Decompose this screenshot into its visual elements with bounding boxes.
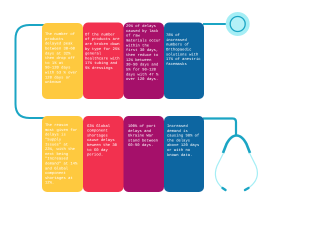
text: port delays: Ukraine War <box>128 134 153 139</box>
text: raw materials: materials occur <box>126 38 161 43</box>
text: product types: 9% dressings <box>85 66 113 71</box>
text: increased demand: the delays <box>167 138 190 143</box>
left connecting tube <box>16 25 44 118</box>
text: raw materials: days with 47 % <box>126 72 159 77</box>
text: reasons for delays: "Increased <box>45 157 68 162</box>
chest piece <box>226 12 250 36</box>
bottom tube to earpieces <box>203 118 236 135</box>
text: reasons for delays: 12%. <box>45 181 54 186</box>
text: increased demand: causing 98% of <box>167 134 200 139</box>
text: raw materials: first 30 days, <box>126 48 158 53</box>
text: product types: of products are <box>85 37 120 42</box>
text: reasons for delays: delays is <box>45 133 66 138</box>
text: products delayed: The number of <box>45 32 76 37</box>
panel: blue top <box>164 22 204 99</box>
ear tip right <box>245 188 248 190</box>
text: component shortages: to 60 day <box>87 148 108 153</box>
infographic canvas <box>0 0 300 200</box>
text: product types: healthcare with <box>85 56 120 61</box>
text: products delayed: between 30-60 <box>45 46 76 52</box>
panel: red top <box>83 22 124 99</box>
text: component shortages: cause delays <box>87 138 115 143</box>
panel: purple top <box>124 22 164 99</box>
text: port delays: 60-90 days. <box>128 143 153 148</box>
text: product types: by type for 25% <box>85 47 120 52</box>
earpiece lower left <box>215 153 224 188</box>
text: port delays: stand between <box>128 138 158 143</box>
text: raw materials: 5% for 90-120 <box>126 68 157 73</box>
text: orthopaedic solutions: facemasks <box>166 62 187 67</box>
text: products delayed: 90-120 days <box>45 66 70 71</box>
ear tip left <box>222 188 226 190</box>
top tube to chest piece <box>203 23 232 25</box>
text: orthopaedic solutions: 17% of anestric <box>166 57 201 62</box>
text: port delays: 100% of port <box>128 124 156 129</box>
text: reasons for delays: demand" at 14% <box>45 162 78 166</box>
text: reasons for delays: most given for <box>45 128 77 133</box>
panel: blue bottom <box>164 116 204 192</box>
text: reasons for delays: and Global <box>45 166 69 171</box>
text: raw materials: 12% between <box>126 58 151 63</box>
text: orthopaedic solutions: increased <box>166 38 187 43</box>
text: raw materials: of raw <box>126 34 141 39</box>
text: orthopaedic solutions: Orthopaedic <box>166 48 192 52</box>
text: reasons for delays: shortages at <box>45 176 73 181</box>
text: component shortages: component <box>87 129 108 134</box>
earpiece lower right <box>248 153 257 188</box>
text: product types: general <box>85 52 102 57</box>
text: raw materials: within the <box>126 43 150 48</box>
text: products delayed: then drop off <box>45 56 76 61</box>
text: increased demand: Increased <box>167 124 188 129</box>
text: component shortages: 63% Global <box>87 124 111 129</box>
text: reasons for delays: 23%, with the <box>45 147 76 152</box>
text: product types: are broken down <box>85 42 120 47</box>
text: component shortages: shortages <box>87 133 108 138</box>
text: reasons for delays: "Supply <box>45 138 62 142</box>
text: raw materials: 29% of delays <box>126 24 156 29</box>
panel: yellow top <box>42 23 83 99</box>
text: increased demand: or with no <box>167 148 191 153</box>
text: component shortages: beween the 30 <box>87 143 118 148</box>
text: product types: Of the number <box>85 32 115 37</box>
text: reasons for delays: component <box>45 171 66 176</box>
text: increased demand: above 120 days <box>167 143 199 148</box>
text: reasons for delays: The reason <box>45 123 68 128</box>
text: increased demand: demand is <box>167 129 188 134</box>
text: products delayed: unknown <box>45 80 61 85</box>
earpiece upper arms <box>223 136 250 153</box>
text: raw materials: caused by lack <box>126 29 159 34</box>
text: orthopaedic solutions: solutions with <box>166 52 198 57</box>
text: products delayed: delayed peak <box>45 42 73 47</box>
text: orthopaedic solutions: numbers of <box>166 43 190 48</box>
panel: purple bottom <box>124 116 164 192</box>
text: increased demand: known data. <box>167 153 192 158</box>
text: products delayed: to 1% at <box>45 61 63 66</box>
text: product types: 17% tubing and <box>85 61 117 66</box>
text: component shortages: period. <box>87 153 103 158</box>
text: products delayed: days at 32% <box>45 51 71 56</box>
text: reasons for delays: Issues" at <box>45 142 68 147</box>
text: products delayed: with 53 % over <box>45 70 77 76</box>
text: products delayed: products <box>45 37 63 42</box>
text: reasons for delays: next being <box>45 152 68 157</box>
text: orthopaedic solutions: 78% of <box>166 33 181 38</box>
text: raw materials: then reduce to <box>126 53 159 58</box>
text: products delayed: 120 days or <box>45 75 70 80</box>
panel: red bottom <box>83 116 124 192</box>
text: raw materials: over 120 days. <box>126 77 158 82</box>
stethoscope tube and head <box>16 12 257 190</box>
text: raw materials: 30-90 days and <box>126 63 158 68</box>
panel: yellow bottom <box>42 116 83 192</box>
text: port delays: delays and <box>128 129 151 134</box>
